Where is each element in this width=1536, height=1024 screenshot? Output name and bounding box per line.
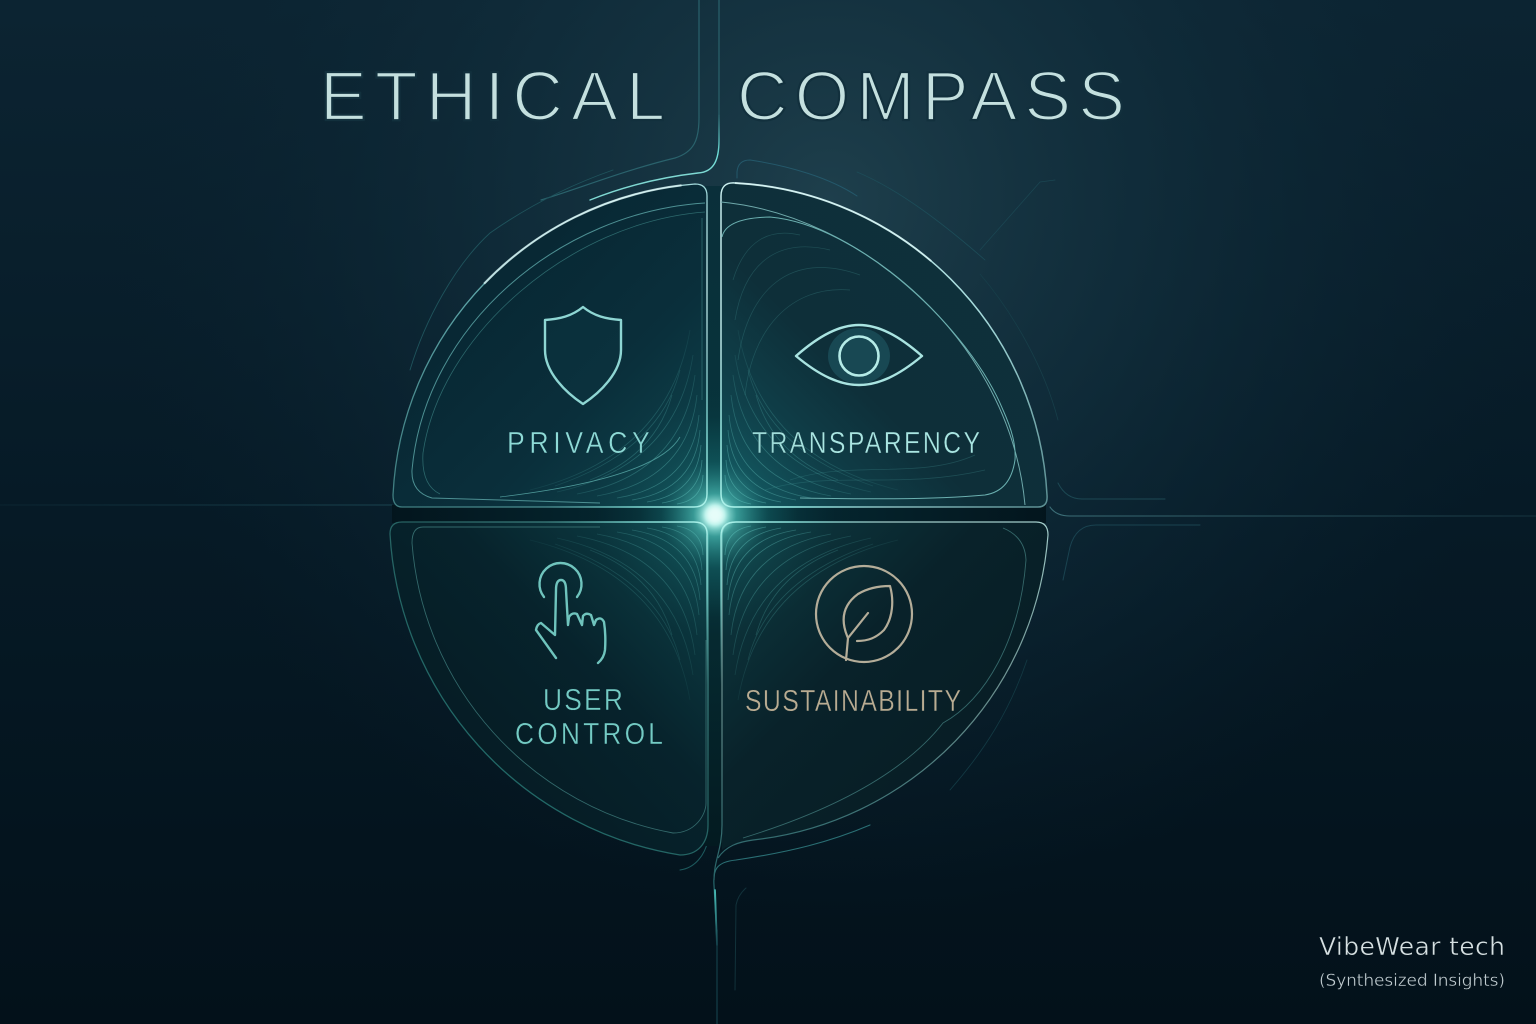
soft glow behind compass: [476, 250, 956, 690]
icon: hand: [536, 563, 605, 663]
compass wheel: [390, 183, 1048, 880]
panel: sustainability: [714, 522, 1048, 880]
label: transparency: TRANSPARENCY: [752, 425, 980, 460]
center glow: [545, 345, 885, 685]
icon: eye: [796, 325, 922, 385]
label: user control: CONTROL: [515, 717, 663, 752]
center gap cross: [392, 186, 1046, 846]
footer credit: [1319, 932, 1505, 991]
panel: transparency: [721, 183, 1047, 507]
label: sustainability: SUSTAINABILITY: [745, 683, 961, 718]
label: privacy: PRIVACY: [507, 426, 650, 461]
title: [320, 57, 1125, 135]
footer credit: (Synthesized Insights): [1319, 971, 1505, 991]
icon: leaf in circle: [816, 566, 912, 662]
icon: shield: [545, 307, 621, 404]
panel: privacy: [393, 184, 707, 507]
label: user control: [515, 683, 663, 752]
footer credit: VibeWear tech: [1319, 932, 1505, 961]
panel: user control: [390, 522, 708, 855]
title: COMPASS: [737, 57, 1125, 135]
title: ETHICAL: [320, 57, 665, 135]
label: user control: USER: [543, 683, 623, 718]
